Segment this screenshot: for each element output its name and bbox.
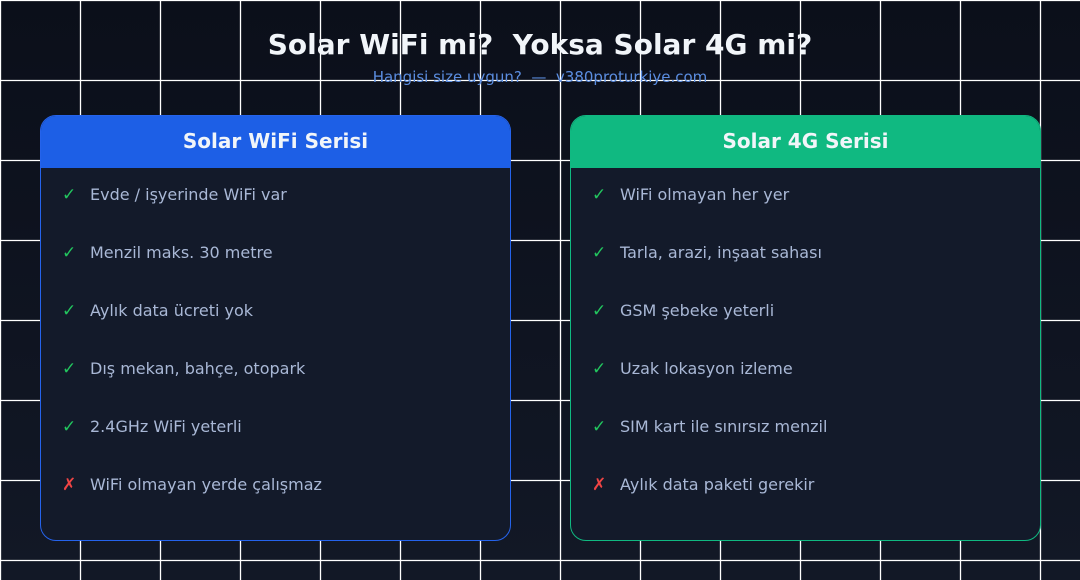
item 2: ✓ [62,243,76,263]
panel: Solar 4G [570,115,1041,541]
heading: Solar WiFi Serisi: Solar WiFi Serisi [183,129,368,153]
item 4: ✓ [592,359,606,379]
item 2: ✓ [592,243,606,263]
panel: Solar WiFi [40,115,511,541]
item 4: Uzak lokasyon izleme [620,359,793,378]
heading: Solar 4G Serisi: Solar 4G Serisi [722,129,889,153]
item 3: GSM şebeke yeterli [620,301,774,320]
heading: Solar WiFi Serisi [41,116,510,168]
item 4: Dış mekan, bahçe, otopark [90,359,305,378]
item 1: ✓ [592,185,606,205]
item 6: ✗ [592,475,606,495]
item 5: ✓ [62,417,76,437]
item 3: Aylık data ücreti yok [90,301,253,320]
item 4: ✓ [62,359,76,379]
item 6: WiFi olmayan yerde çalışmaz [90,475,322,494]
item 2: Menzil maks. 30 metre [90,243,273,262]
item 6: Aylık data paketi gerekir [620,475,814,494]
item 1: ✓ [62,185,76,205]
item 1: Evde / işyerinde WiFi var [90,185,287,204]
item 5: SIM kart ile sınırsız menzil [620,417,827,436]
title: Solar WiFi mi? Yoksa Solar 4G mi? [268,28,812,61]
subtitle: Hangisi size uygun? — v380proturkiye.com [373,68,707,86]
item 3: ✓ [62,301,76,321]
heading: Solar 4G Serisi [571,116,1040,168]
item 2: Tarla, arazi, inşaat sahası [620,243,822,262]
item 3: ✓ [592,301,606,321]
item 1: WiFi olmayan her yer [620,185,789,204]
item 5: 2.4GHz WiFi yeterli [90,417,242,436]
item 6: ✗ [62,475,76,495]
item 5: ✓ [592,417,606,437]
